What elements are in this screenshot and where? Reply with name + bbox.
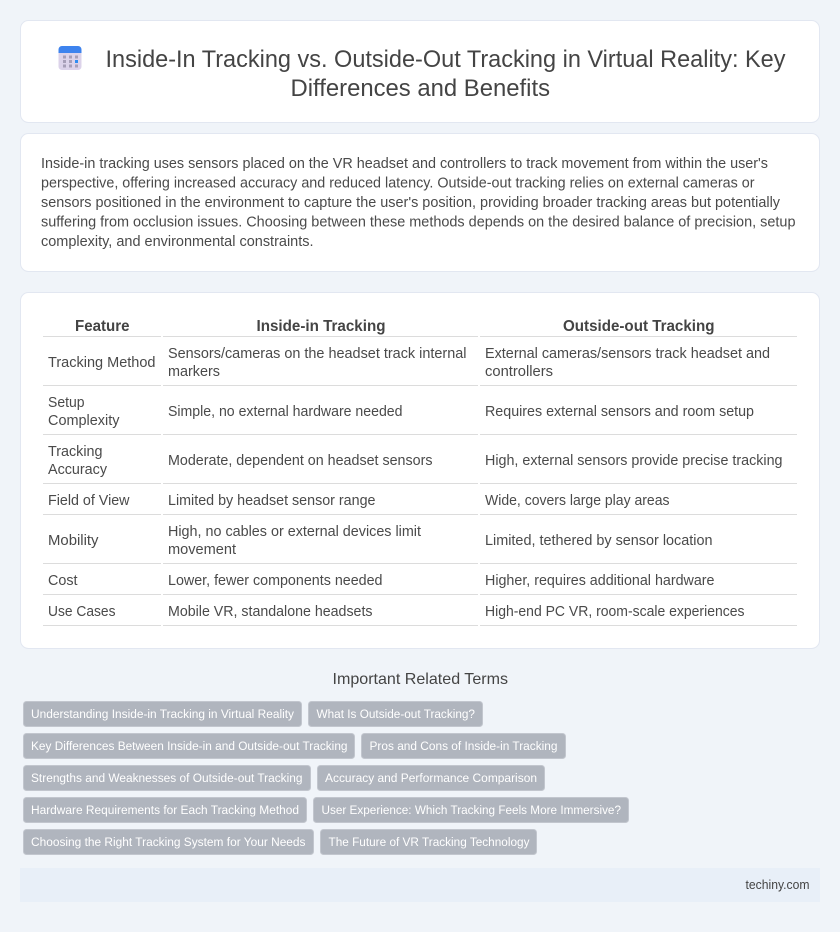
table row: use cases: High-end PC VR, room-scale experiences (485, 604, 744, 620)
tag row 5: Choosing the Right Tracking System for Your Needs (31, 835, 306, 849)
tag row 3 (24, 766, 544, 790)
tag row 3: Accuracy and Performance Comparison (325, 771, 537, 785)
table row: tracking method: Tracking Method (48, 355, 156, 371)
panel: comparison table (20, 292, 820, 648)
tag row 3: Strengths and Weaknesses of Outside-out Tracking (31, 771, 303, 785)
table header row: Inside-in Tracking (256, 318, 386, 335)
tag row 4: Hardware Requirements for Each Tracking Method (31, 803, 299, 817)
table row: mobility: Mobility (48, 533, 99, 549)
table row: tracking accuracy: Moderate, dependent on headset sensors (168, 453, 432, 469)
tag row 4 (24, 798, 628, 822)
text block: introduction paragraph: complexity, and environmental constraints. (41, 234, 314, 250)
table row: tracking accuracy: Accuracy (48, 462, 108, 478)
table row: setup complexity: Simple, no external hardware needed (168, 404, 402, 420)
table row: tracking method: Sensors/cameras on the headset track internal (168, 346, 466, 362)
icon: calendar (58, 46, 82, 70)
table row: setup complexity: Complexity (48, 413, 120, 429)
heading: important related terms: Important Related Terms (332, 671, 508, 688)
table row: cost: Higher, requires additional hardware (485, 573, 714, 589)
table row: tracking method: External cameras/sensors track headset and (485, 346, 770, 362)
table row: mobility (43, 524, 797, 564)
table row: field of view: Wide, covers large play areas (485, 493, 670, 509)
text block: introduction paragraph: Inside-in tracking uses sensors placed on the VR headset and controllers to track movement from within the user's (41, 156, 768, 172)
table row: use cases (43, 604, 797, 626)
title: Differences and Benefits (290, 75, 550, 102)
table row: cost: Lower, fewer components needed (168, 573, 382, 589)
panel: introduction (20, 134, 820, 272)
table row: field of view: Field of View (48, 493, 130, 509)
tag row 1: What Is Outside-out Tracking? (316, 707, 475, 721)
table row: cost (43, 573, 797, 595)
table header row (43, 318, 797, 337)
table header row: Feature (75, 318, 130, 335)
text block: introduction paragraph: suffering from occlusion issues. Choosing between these methods depends on the desired balance of precision, setup (41, 214, 796, 230)
title (106, 46, 786, 102)
table row: tracking method (43, 346, 797, 386)
tag row 2: Key Differences Between Inside-in and Outside-out Tracking (31, 739, 348, 753)
text block: introduction paragraph: sensors positioned in the environment to capture the user's position, providing broader tracking areas but potentially (41, 195, 781, 211)
table row: setup complexity: Requires external sensors and room setup (485, 404, 754, 420)
tag row 5: The Future of VR Tracking Technology (328, 835, 530, 849)
table row: mobility: High, no cables or external devices limit (168, 524, 421, 540)
table row: tracking method: markers (168, 364, 220, 380)
table row: use cases: Use Cases (48, 604, 116, 620)
table row: setup complexity (43, 395, 797, 435)
tag row 2: Pros and Cons of Inside-in Tracking (370, 739, 558, 753)
panel: header (20, 20, 820, 122)
table header row: Outside-out Tracking (563, 318, 714, 335)
panel: related term tags (24, 702, 628, 854)
table row: mobility: movement (168, 542, 236, 558)
table row: cost: Cost (48, 573, 78, 589)
tag row 4: User Experience: Which Tracking Feels More Immersive? (322, 803, 621, 817)
footer: techiny.com (746, 877, 810, 892)
table row: tracking method: controllers (485, 364, 553, 380)
table row: use cases: Mobile VR, standalone headsets (168, 604, 372, 620)
title: Inside-In Tracking vs. Outside-Out Tracking in Virtual Reality: Key (106, 46, 786, 73)
table row: setup complexity: Setup (48, 395, 84, 411)
tag row 1: Understanding Inside-in Tracking in Virtual Reality (31, 707, 295, 721)
table row: field of view (43, 493, 797, 515)
text block: introduction paragraph: perspective, offering increased accuracy and reduced latency. Outside-out tracking relies on external cameras or (41, 176, 755, 192)
tag row 1 (24, 702, 482, 726)
table row: tracking accuracy: High, external sensors provide precise tracking (485, 453, 782, 469)
table row: tracking accuracy: Tracking (48, 444, 102, 460)
tag row 5 (24, 830, 536, 854)
text block: introduction paragraph (41, 156, 796, 250)
table row: field of view: Limited by headset sensor range (168, 493, 376, 509)
footer (20, 868, 820, 902)
tag row 2 (24, 734, 566, 758)
table row: tracking accuracy (43, 444, 797, 484)
table row: mobility: Limited, tethered by sensor location (485, 533, 712, 549)
